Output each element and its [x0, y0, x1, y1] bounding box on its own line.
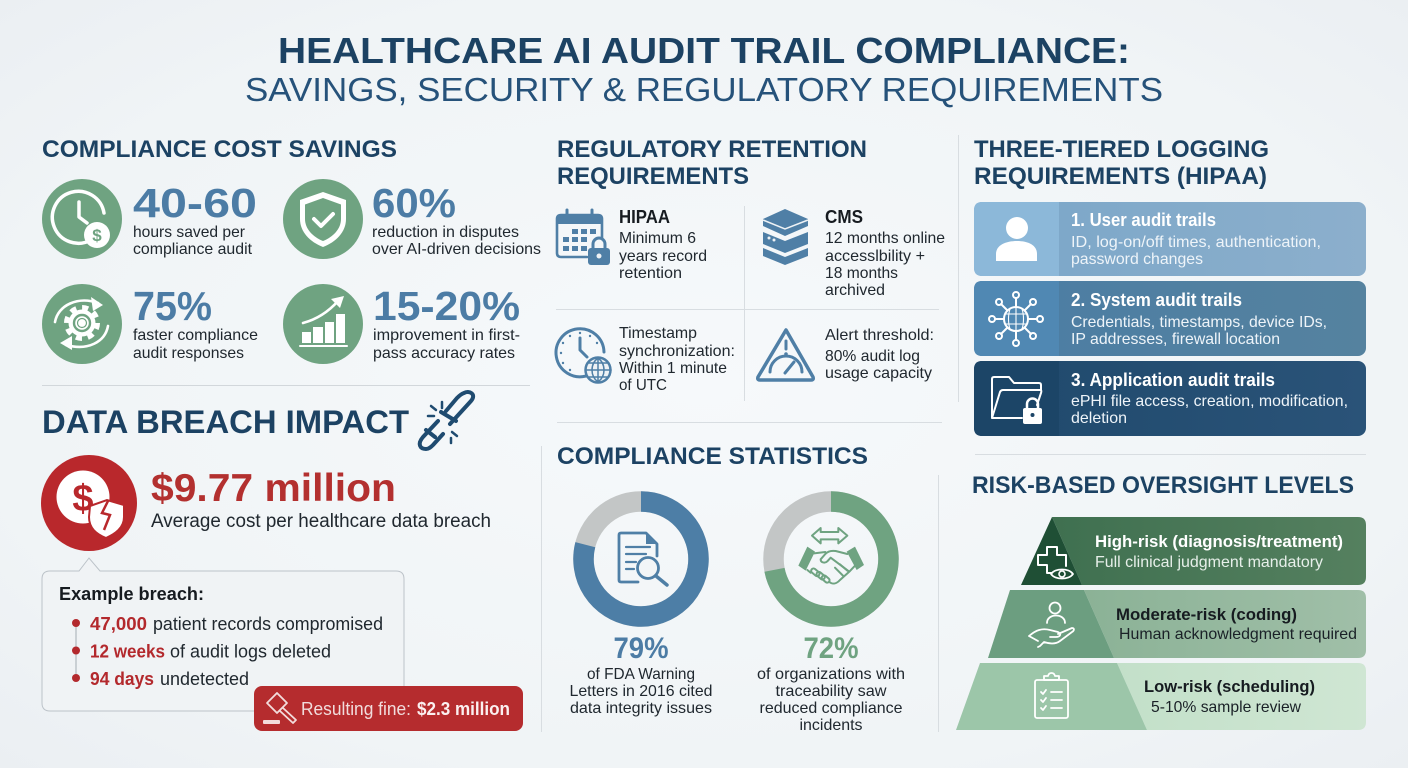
level: low risk: 5-10% sample review [1151, 699, 1301, 716]
tier 1: user audit trails: password changes [1071, 251, 1203, 268]
panel: compliance statistics [557, 443, 905, 734]
chart: 72% donut [757, 502, 905, 734]
level: high risk [1021, 517, 1366, 585]
stat: 15-20% improvement [283, 283, 520, 364]
item: HIPAA: Minimum 6 [619, 230, 696, 247]
level: high risk: Full clinical judgment mandatory [1095, 554, 1323, 571]
panel: three-tiered logging requirements [974, 136, 1366, 436]
tier 2: system audit trails: 2. System audit trails [1071, 290, 1242, 310]
stat: 60% reduction: over AI-driven decisions [372, 241, 541, 258]
chart: 79% donut: data integrity issues [570, 700, 712, 717]
stat: 75% faster: faster compliance [133, 327, 258, 344]
item: HIPAA: retention [619, 265, 682, 282]
item: timestamp synchronization [556, 325, 735, 394]
item: alert threshold [758, 327, 934, 382]
item: CMS: archived [825, 282, 885, 299]
stat: 75% faster [42, 283, 258, 364]
title [245, 30, 1163, 108]
item: HIPAA [557, 207, 707, 282]
heading: three-tiered logging [974, 136, 1269, 190]
callout: example breach: 94 days [90, 669, 154, 689]
callout: example breach: of audit logs deleted [170, 642, 331, 662]
tier 2: system audit trails: IP addresses, firewall location [1071, 331, 1280, 348]
heading: data breach impact: DATA BREACH IMPACT [42, 404, 409, 440]
stat: 40-60 hours: 40-60 [133, 180, 257, 226]
heading: compliance cost savings: COMPLIANCE COST SAVINGS [42, 136, 397, 163]
callout: example breach [42, 558, 404, 711]
tier 3: application audit trails: 3. Application audit trails [1071, 370, 1275, 390]
chart: 79% donut: of FDA Warning [587, 666, 695, 683]
stat: 75% faster: audit responses [133, 345, 244, 362]
stat: 15-20% improvement: 15-20% [373, 283, 520, 329]
heading: risk-based oversight levels: RISK-BASED OVERSIGHT LEVELS [972, 472, 1354, 499]
callout: example breach: undetected [160, 669, 249, 689]
stat: 15-20% improvement: pass accuracy rates [373, 345, 515, 362]
chart: 79% donut: 79% [614, 632, 668, 665]
tier 2: system audit trails [974, 281, 1366, 356]
chart: 79% donut [570, 502, 712, 717]
heading: three-tiered logging: THREE-TIERED LOGGING [974, 136, 1269, 163]
icon: broken chain link [420, 392, 473, 449]
icon: broken dollar shield [41, 455, 137, 551]
stat: average breach cost: $9.77 million [151, 467, 396, 510]
level: moderate risk: Moderate-risk (coding) [1116, 605, 1297, 624]
item: HIPAA: HIPAA [619, 207, 670, 227]
stat: 40-60 hours: compliance audit [133, 241, 253, 258]
stat: 40-60 hours: hours saved per [133, 224, 246, 241]
tier 2: system audit trails: Credentials, timestamps, device IDs, [1071, 314, 1327, 331]
heading: regulatory retention [557, 136, 867, 190]
item: timestamp synchronization: Timestamp [619, 325, 697, 342]
heading: regulatory retention: REGULATORY RETENTION [557, 136, 867, 163]
stat: 15-20% improvement: improvement in first- [373, 327, 520, 344]
item: HIPAA: years record [619, 248, 707, 265]
stat: 40-60 hours: $ [92, 226, 102, 245]
level: high risk: High-risk (diagnosis/treatment) [1095, 532, 1343, 551]
item: alert threshold: usage capacity [825, 365, 932, 382]
tier 3: application audit trails: ePHI file access, creation, modification, [1071, 393, 1348, 410]
heading: three-tiered logging: REQUIREMENTS (HIPAA) [974, 163, 1267, 190]
item: CMS: 18 months [825, 265, 898, 282]
chart: 79% donut: Letters in 2016 cited [570, 683, 712, 700]
panel: data breach impact [41, 392, 523, 731]
level: moderate risk [988, 590, 1366, 658]
callout: example breach: 47,000 [90, 614, 147, 634]
item: timestamp synchronization: of UTC [619, 377, 667, 394]
tier 3: application audit trails [974, 361, 1366, 436]
level: low risk: Low-risk (scheduling) [1144, 677, 1315, 696]
level: low risk [956, 663, 1366, 730]
callout: resulting fine [254, 686, 523, 731]
stat: 60% reduction: 60% [372, 180, 456, 226]
item: alert threshold: 80% audit log [825, 348, 920, 365]
tier 3: application audit trails: deletion [1071, 410, 1127, 427]
stat: 75% faster: 75% [133, 283, 212, 329]
callout: example breach: 12 weeks [90, 642, 165, 662]
chart: 72% donut: of organizations with [757, 666, 905, 683]
tier 1: user audit trails [974, 202, 1366, 276]
panel: compliance cost savings [42, 136, 541, 364]
level: moderate risk: Human acknowledgment required [1119, 626, 1357, 643]
chart: 72% donut: incidents [800, 717, 862, 734]
callout: resulting fine: $2.3 million [417, 699, 510, 719]
title: SAVINGS, SECURITY & REGULATORY REQUIREMENTS [245, 71, 1163, 108]
callout: resulting fine: Resulting fine: [301, 699, 411, 719]
panel: regulatory retention requirements [556, 136, 945, 401]
item: CMS: 12 months online [825, 230, 945, 247]
item: timestamp synchronization: synchronization: [619, 343, 735, 360]
panel: risk-based oversight levels [956, 472, 1366, 730]
stat: 60% reduction [283, 179, 541, 259]
item: CMS [763, 207, 945, 299]
tier 1: user audit trails: ID, log-on/off times, authentication, [1071, 234, 1321, 251]
chart: 72% donut: 72% [804, 632, 858, 665]
callout: example breach: patient records compromised [153, 614, 383, 634]
chart: 72% donut: traceability saw [776, 683, 887, 700]
chart: 72% donut: reduced compliance [760, 700, 903, 717]
stat: 60% reduction: reduction in disputes [372, 224, 519, 241]
title: HEALTHCARE AI AUDIT TRAIL COMPLIANCE: [278, 30, 1130, 71]
item: timestamp synchronization: Within 1 minute [619, 360, 727, 377]
stat: average breach cost [151, 467, 491, 532]
icon: broken dollar shield: $ [72, 478, 94, 520]
item: CMS: accesslbility + [825, 248, 925, 265]
stat: 40-60 hours [42, 179, 257, 259]
stat: average breach cost: Average cost per healthcare data breach [151, 511, 491, 532]
tier 1: user audit trails: 1. User audit trails [1071, 210, 1216, 230]
heading: compliance statistics: COMPLIANCE STATISTICS [557, 443, 868, 470]
heading: regulatory retention: REQUIREMENTS [557, 163, 749, 190]
item: alert threshold: Alert threshold: [825, 327, 934, 344]
callout: example breach: Example breach: [59, 584, 204, 604]
item: CMS: CMS [825, 207, 863, 227]
